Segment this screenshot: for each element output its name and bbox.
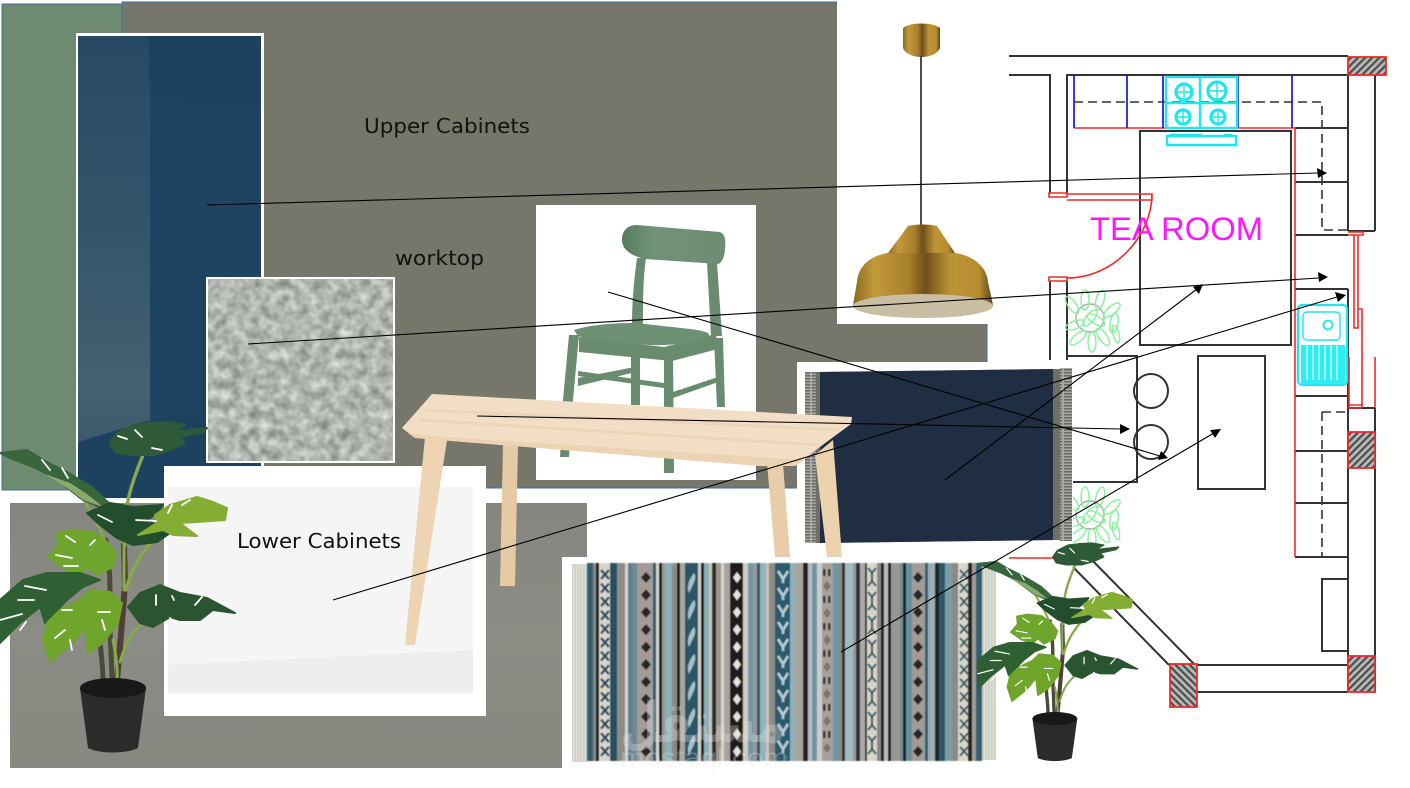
arrow: lower cabinets — [333, 297, 1337, 600]
arrow: navy rug — [945, 289, 1197, 480]
label: upper cabinets: Upper Cabinets — [364, 114, 530, 138]
label: lower cabinets: Lower Cabinets — [237, 529, 401, 553]
arrow: chair — [608, 292, 1160, 456]
chair card — [536, 205, 756, 480]
arrow: worktop — [248, 278, 1319, 344]
floor plan — [1000, 0, 1400, 720]
arrow: table — [477, 416, 1121, 429]
plant: left monstera — [0, 422, 235, 752]
label: worktop: worktop — [395, 246, 484, 270]
upper cabinet navy panel — [76, 33, 264, 500]
arrow: upper cabinets — [207, 173, 1318, 205]
white lamp backdrop — [837, 0, 1010, 324]
arrowheads — [1120, 168, 1346, 460]
floor swatch — [10, 503, 587, 768]
green wall swatch — [2, 4, 124, 490]
icon: hob — [1166, 77, 1237, 145]
icon: plant symbols — [1063, 289, 1122, 549]
TEA ROOM label: TEA ROOM — [1090, 211, 1263, 247]
arrows linking materials to plan — [207, 173, 1337, 652]
icon: hatched columns — [1170, 57, 1386, 707]
icon: sink — [1298, 305, 1347, 385]
plant: right monstera — [978, 543, 1138, 761]
navy rug — [797, 362, 1073, 548]
arrow: striped rug — [841, 433, 1214, 652]
lamp pendant — [853, 24, 993, 318]
table — [402, 394, 852, 645]
lower cabinet swatch — [164, 466, 486, 716]
olive wall colour panel — [122, 2, 987, 488]
watermark: mostaql.com — [620, 744, 788, 772]
watermark — [620, 691, 788, 772]
watermark: مستقل — [620, 691, 785, 756]
striped rug — [562, 557, 1000, 768]
worktop terrazzo swatch — [206, 277, 395, 463]
